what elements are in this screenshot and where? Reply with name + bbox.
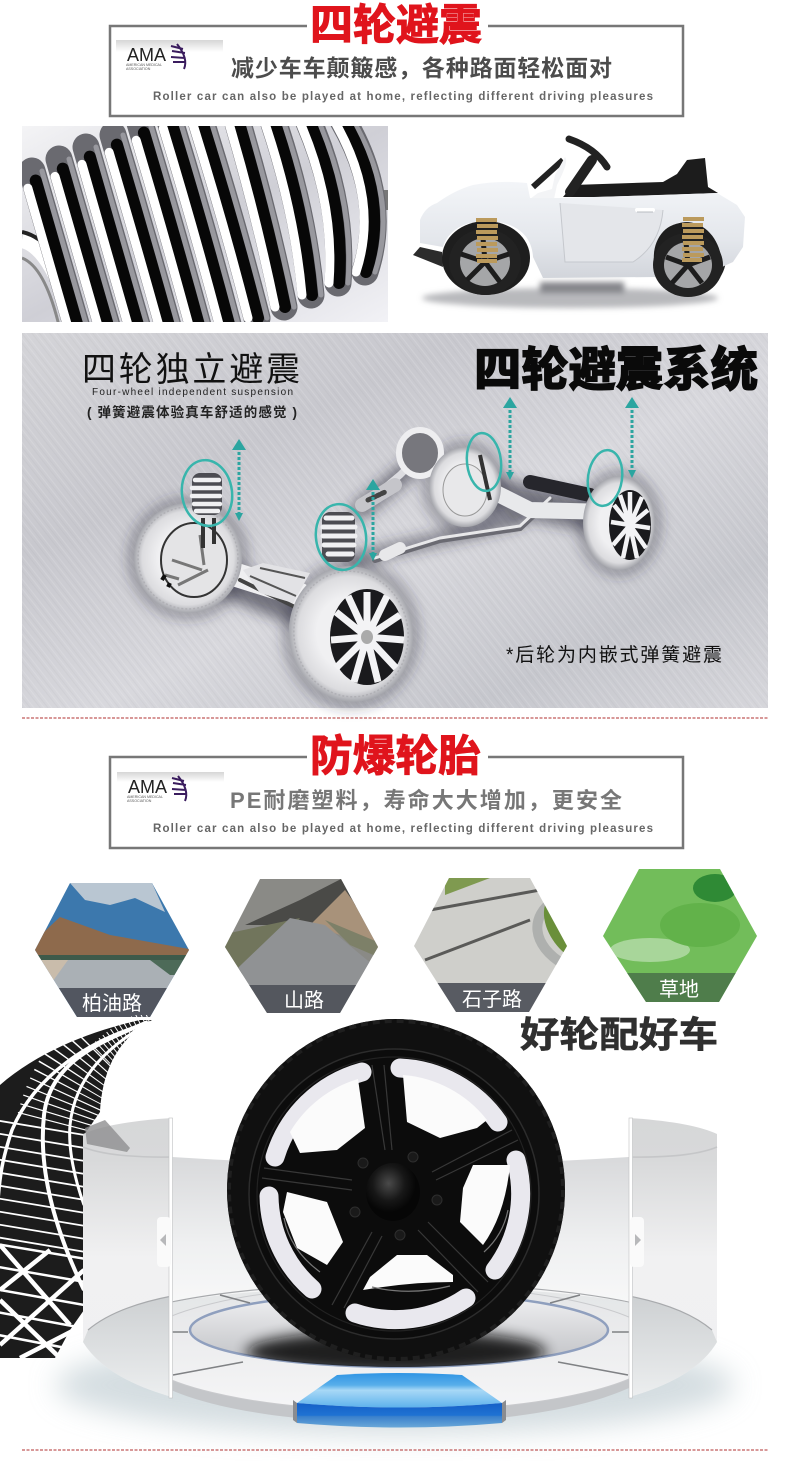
wheel rear near <box>583 476 655 570</box>
right glass panel <box>629 1118 717 1398</box>
title: 防爆轮胎: 防爆轮胎 <box>310 733 481 781</box>
slogan: 好轮配好车 <box>520 1014 718 1055</box>
label: 柏油路 <box>82 992 142 1015</box>
left glass panel <box>83 1118 172 1398</box>
english tagline: Roller car can also be played at home, reflecting different driving pleasures <box>153 823 653 835</box>
hub bolts <box>350 1152 442 1240</box>
exhaust pipe and axles <box>205 450 610 612</box>
gold spring <box>476 220 498 261</box>
car ground shadow <box>422 282 718 308</box>
chassis shadows <box>134 447 655 702</box>
teal ellipses <box>178 431 626 573</box>
logo: AMA <box>117 772 224 803</box>
logo: AMA: ASSOCIATION <box>127 799 152 803</box>
chrome edges <box>284 1210 508 1291</box>
hexagon: 柏油路 <box>35 883 189 1017</box>
steering wheel <box>569 139 607 192</box>
front splitter <box>413 247 443 267</box>
chassis illustration <box>134 430 655 712</box>
cylinder base line <box>88 1283 713 1330</box>
footnote: *后轮为内嵌式弹簧避震 <box>506 644 722 666</box>
platform top <box>135 1285 663 1411</box>
wheel rear far <box>429 447 501 527</box>
front wheel <box>449 220 521 295</box>
subtitle: 减少车车颠簸感，各种路面轻松面对 <box>231 55 612 81</box>
photo: chrome spring <box>22 126 388 322</box>
platform side <box>135 1340 663 1423</box>
centre cap <box>366 1163 420 1221</box>
tyre tracks <box>0 1020 152 1360</box>
teal arrow 1 <box>232 439 246 521</box>
teal arrow 2 <box>366 479 380 561</box>
logo: AMA: AMERICAN MEDICAL <box>127 795 163 799</box>
display stand <box>55 1118 735 1435</box>
divider <box>22 717 768 719</box>
transmission <box>243 563 310 603</box>
inner disc <box>190 1293 608 1367</box>
header: 四轮避震 <box>110 2 683 116</box>
title: 四轮避震: 四轮避震 <box>310 2 482 50</box>
base of cylinder <box>84 1287 717 1410</box>
label: 草地 <box>659 978 699 1001</box>
label: 石子路 <box>462 988 522 1011</box>
heading: 四轮避震系统: 四轮避震系统 <box>474 343 758 396</box>
english subtitle: Four-wheel independent suspension <box>92 387 293 398</box>
panel handle <box>157 1217 171 1267</box>
divider <box>22 1449 768 1451</box>
rim windows <box>283 1075 510 1290</box>
cockpit and seat <box>563 158 718 197</box>
wheel arches <box>442 221 726 295</box>
car body <box>420 182 745 278</box>
hexagon: 草地 <box>600 865 760 1005</box>
gold spring <box>682 219 704 260</box>
wheel <box>227 1019 565 1361</box>
stand glow <box>55 1335 735 1435</box>
logo: AMA <box>116 40 223 71</box>
note in brackets: ( 弹簧避震体验真车舒适的感觉 ) <box>87 404 297 420</box>
platform segments <box>138 1295 662 1375</box>
photo: white ride-on car with springs <box>413 139 745 308</box>
logo: AMA: AMA <box>128 777 167 797</box>
blue segment <box>293 1373 506 1428</box>
english tagline: Roller car can also be played at home, reflecting different driving pleasures <box>153 91 653 103</box>
logo: AMA: AMA <box>127 45 166 65</box>
back wall <box>172 1157 629 1330</box>
teal arrow 4 <box>625 397 639 478</box>
hexagon: 山路 <box>225 879 378 1013</box>
wheel front far <box>134 503 242 613</box>
hexagon: 石子路 <box>410 875 570 1015</box>
header: 防爆轮胎 <box>110 733 683 848</box>
panel: suspension system <box>22 333 768 712</box>
windscreen frame <box>530 157 566 199</box>
tyre <box>227 1019 565 1361</box>
steering wheel <box>399 430 441 476</box>
label: 山路 <box>284 989 324 1012</box>
heading: 四轮独立避震: 四轮独立避震 <box>82 351 300 389</box>
white rim arcs <box>269 1068 521 1320</box>
front springs <box>192 473 355 562</box>
rear wheel <box>653 219 723 297</box>
spoke highlights <box>262 1065 518 1308</box>
logo: AMA: AMERICAN MEDICAL <box>126 63 162 67</box>
logo: AMA: ASSOCIATION <box>126 67 151 71</box>
wheel front near <box>278 556 424 712</box>
wheel contact shadow <box>246 1330 546 1374</box>
panel handle <box>630 1217 644 1267</box>
teal arrow 3 <box>503 397 517 480</box>
subtitle: PE耐磨塑料，寿命大大增加，更安全 <box>230 788 622 813</box>
